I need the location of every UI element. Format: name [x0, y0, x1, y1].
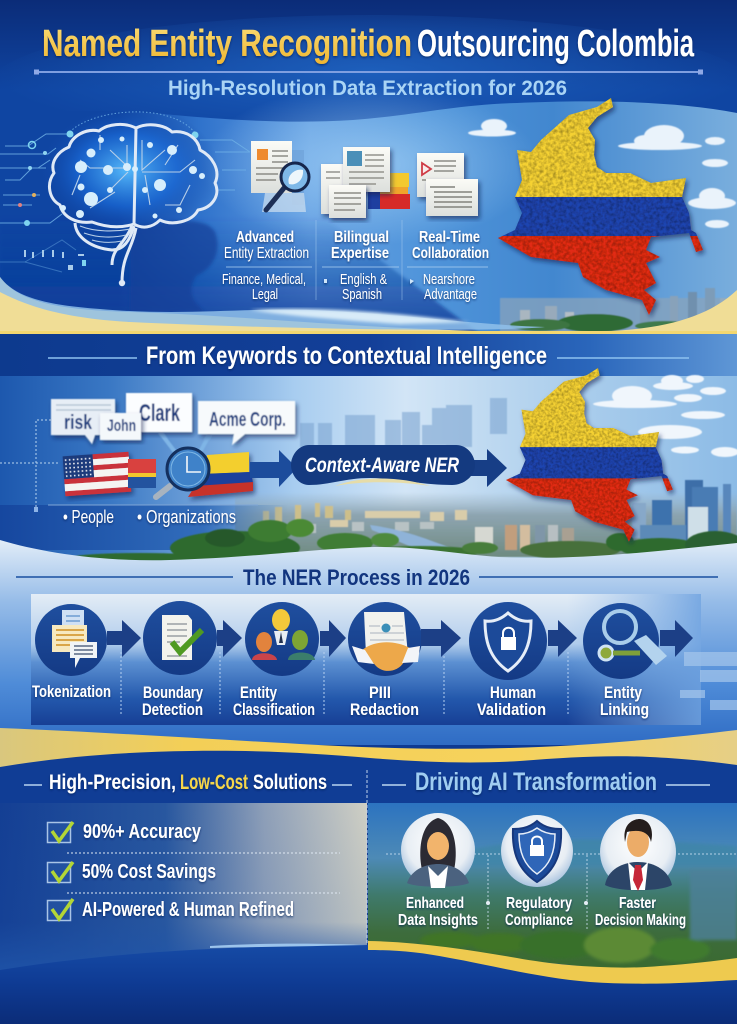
- panel: high precision solutions: [0, 771, 367, 973]
- circuit lines left: [0, 112, 250, 272]
- text: real-time collaboration: [410, 229, 489, 303]
- step: Entity Linking: [583, 603, 693, 719]
- bubble: John: John: [107, 416, 136, 435]
- benefit: AI powered: AI-Powered & Human Refined: [82, 899, 294, 921]
- icon: real-time documents: [417, 153, 478, 216]
- text: entity types: • Organizations: [137, 507, 236, 527]
- text: entity types: • People: [63, 507, 114, 527]
- icon: AI brain: [0, 104, 250, 286]
- panel: NER process: [0, 540, 737, 745]
- text: advanced entity extraction: Finance, Medical,: [222, 272, 306, 288]
- map: Colombia flag (hero): [490, 90, 710, 321]
- step: PIII Redaction: [348, 602, 461, 719]
- title: Named Entity Recognition: [42, 23, 412, 65]
- icon: US flag: [63, 452, 131, 496]
- benefit: cost savings: [48, 861, 216, 883]
- bubble: risk: [51, 399, 115, 444]
- footer band with gold wave: [0, 941, 737, 1024]
- icon: clock magnifier: [156, 448, 209, 497]
- step: Entity Classification: Entity: [240, 684, 278, 702]
- panel: driving AI transformation: [368, 768, 737, 970]
- bubble: Acme Corp.: Acme Corp.: [209, 409, 286, 431]
- step: Human Validation: [469, 602, 577, 719]
- text: real-time collaboration: Real-Time: [419, 229, 480, 246]
- icon: Colombian flag: [188, 452, 253, 497]
- avatar: enhanced data insights: [398, 813, 478, 929]
- avatar: enhanced data insights: Data Insights: [398, 912, 478, 929]
- clouds: [468, 119, 736, 228]
- text: real-time collaboration: Nearshore: [423, 272, 475, 288]
- avatar: regulatory compliance: Regulatory: [506, 895, 572, 912]
- text: real-time collaboration: Advantage: [424, 287, 477, 303]
- yellow wave divider: [0, 728, 737, 775]
- step: Entity Linking: Entity: [604, 684, 643, 702]
- text: bilingual expertise: Spanish: [342, 287, 382, 303]
- panel: keywords to context header: [0, 334, 737, 376]
- heading: Driving AI Transformation: [415, 768, 657, 796]
- bubble: Clark: Clark: [139, 400, 180, 427]
- avatar: faster decision making: Decision Making: [595, 912, 686, 929]
- bubble: risk: risk: [64, 412, 93, 434]
- step: Tokenization: [32, 604, 141, 701]
- yellow wave: [0, 277, 737, 334]
- step: PIII Redaction: Redaction: [350, 701, 419, 719]
- bubble: John: [100, 413, 141, 440]
- avatar: regulatory compliance: Compliance: [505, 912, 573, 929]
- brain outline: [49, 124, 217, 283]
- panel: contextual intelligence hero: [0, 362, 737, 567]
- step: Entity Linking: Linking: [600, 701, 649, 719]
- step: Human Validation: Validation: [477, 701, 546, 719]
- benefit: accuracy: [48, 821, 202, 843]
- bubble: Acme Corp.: [198, 401, 295, 445]
- panel: bottom base: [0, 751, 737, 1024]
- pill: Context-Aware NER: Context-Aware NER: [305, 454, 460, 477]
- backdrop hills and trees: [420, 840, 737, 963]
- text: advanced entity extraction: Advanced: [236, 229, 294, 246]
- heading: [49, 771, 327, 794]
- bubble: Clark: [126, 393, 192, 432]
- faded skyline: [300, 398, 507, 447]
- icon: bilingual documents: [321, 147, 410, 218]
- text: advanced entity extraction: Entity Extraction: [224, 245, 309, 262]
- panel: hero with brain, features and map: [0, 85, 737, 334]
- heading: Solutions: [253, 771, 327, 794]
- left lower shade: [0, 505, 370, 550]
- city skyline: [235, 480, 737, 557]
- step: Tokenization: Tokenization: [32, 683, 111, 701]
- step: Entity Classification: Classification: [233, 701, 315, 719]
- pill: Context-Aware NER: [291, 445, 475, 486]
- heading: The NER Process in 2026: [243, 565, 470, 590]
- text: bilingual expertise: English &: [340, 272, 387, 288]
- heading: From Keywords to Contextual Intelligence: [146, 342, 547, 370]
- subtitle: High-Resolution Data Extraction for 2026: [168, 77, 567, 100]
- text: bilingual expertise: Expertise: [331, 245, 389, 262]
- step: Boundary Detection: Detection: [142, 701, 203, 719]
- arrow: to Context-Aware NER: [250, 450, 297, 487]
- icon: small flag: [128, 459, 156, 488]
- benefit: AI powered: [48, 899, 294, 921]
- benefit: cost savings: 50% Cost Savings: [82, 861, 216, 883]
- heading: Low-Cost: [180, 771, 248, 794]
- step: PIII Redaction: PIII: [369, 684, 391, 702]
- head silhouette: [130, 221, 218, 312]
- step: Entity Classification: [233, 602, 346, 719]
- text: advanced entity extraction: Legal: [252, 287, 278, 303]
- avatar: regulatory compliance: [501, 815, 573, 929]
- heading: High-Precision,: [49, 771, 176, 794]
- text: advanced entity extraction: [222, 229, 309, 303]
- skyline behind map: [500, 288, 737, 332]
- avatar: faster decision making: Faster: [619, 895, 656, 912]
- icon: document with magnifier: [251, 141, 309, 212]
- arrow: to map: [470, 449, 507, 487]
- map: Colombia flag (context): [499, 362, 679, 546]
- text: bilingual expertise: [324, 229, 389, 303]
- process panel background: [31, 594, 737, 725]
- trees: [60, 519, 737, 567]
- clouds: [593, 375, 737, 457]
- panel: title header: [0, 0, 737, 155]
- feature dividers: [226, 220, 488, 300]
- text: real-time collaboration: Collaboration: [412, 245, 489, 262]
- benefit: accuracy: 90%+ Accuracy: [83, 821, 202, 843]
- step: Boundary Detection: [142, 601, 242, 719]
- step: Human Validation: Human: [490, 684, 536, 702]
- avatar: enhanced data insights: Enhanced: [406, 895, 464, 912]
- callout: keyword bubbles: [51, 393, 295, 452]
- text: bilingual expertise: Bilingual: [334, 229, 389, 246]
- avatar: faster decision making: [595, 814, 686, 929]
- step: Boundary Detection: Boundary: [143, 684, 204, 702]
- text: entity types: [63, 507, 236, 527]
- center divider: [366, 770, 368, 950]
